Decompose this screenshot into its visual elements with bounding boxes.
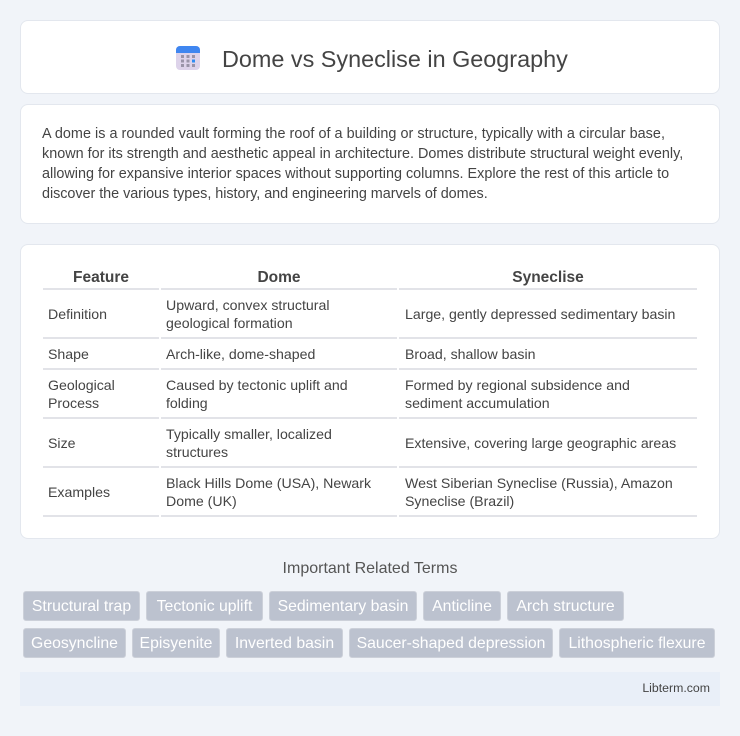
related terms tags: Arch structure xyxy=(516,598,615,615)
comparison table: Upward, convex structural xyxy=(166,297,329,313)
comparison table: Process xyxy=(48,395,99,411)
comparison table panel xyxy=(20,244,720,539)
related terms tags: Inverted basin xyxy=(235,635,334,652)
comparison table: Syneclise xyxy=(512,269,584,286)
comparison table: geological formation xyxy=(166,315,293,331)
footer credit: Libterm.com xyxy=(642,681,710,695)
related terms tags: Lithospheric flexure xyxy=(568,635,705,652)
comparison table: Dome xyxy=(257,269,301,286)
comparison table: Formed by regional subsidence and xyxy=(405,377,630,393)
comparison table: Caused by tectonic uplift and xyxy=(166,377,348,393)
footer bar xyxy=(20,672,720,706)
comparison table xyxy=(43,269,697,517)
comparison table: Geological xyxy=(48,377,115,393)
intro paragraph: allowing for expansive interior spaces without supporting columns. Explore the rest of this article to xyxy=(42,166,669,182)
related terms tags: Structural trap xyxy=(32,598,131,615)
related terms tags: Anticline xyxy=(432,598,492,615)
intro paragraph: discover the various types, history, and engineering marvels of domes. xyxy=(42,186,488,202)
comparison table: folding xyxy=(166,395,208,411)
comparison table: Broad, shallow basin xyxy=(405,346,535,362)
title: Dome vs Syneclise in Geography xyxy=(222,46,568,72)
comparison table: West Siberian Syneclise (Russia), Amazon xyxy=(405,475,673,491)
related terms tags: Geosyncline xyxy=(31,635,118,652)
intro paragraph xyxy=(42,126,683,202)
related terms tags: Episyenite xyxy=(140,635,212,652)
comparison table: Feature xyxy=(73,269,129,286)
comparison table: Typically smaller, localized xyxy=(166,426,332,442)
header card xyxy=(20,20,720,94)
comparison table: Arch-like, dome-shaped xyxy=(166,346,315,362)
intro paragraph: A dome is a rounded vault forming the roof of a building or structure, typically with a circular base, xyxy=(42,126,665,142)
comparison table: Definition xyxy=(48,306,107,322)
intro paragraph: known for its strength and aesthetic appeal in architecture. Domes distribute structural weight evenly, xyxy=(42,146,683,162)
related terms tags: Tectonic uplift xyxy=(157,598,252,615)
related terms heading: Important Related Terms xyxy=(283,560,457,577)
related terms tags: Saucer-shaped depression xyxy=(357,635,545,652)
related terms tags: Sedimentary basin xyxy=(278,598,408,615)
intro text panel xyxy=(20,104,720,224)
comparison table: Dome (UK) xyxy=(166,493,237,509)
comparison table: sediment accumulation xyxy=(405,395,550,411)
comparison table: Shape xyxy=(48,346,89,362)
comparison table: Size xyxy=(48,435,76,451)
icon: calendar xyxy=(176,46,200,70)
comparison table: Examples xyxy=(48,484,110,500)
comparison table: Black Hills Dome (USA), Newark xyxy=(166,475,371,491)
comparison table: Extensive, covering large geographic areas xyxy=(405,435,676,451)
related terms tags xyxy=(23,591,715,658)
comparison table: Large, gently depressed sedimentary basin xyxy=(405,306,675,322)
comparison table: structures xyxy=(166,444,228,460)
comparison table: Syneclise (Brazil) xyxy=(405,493,514,509)
